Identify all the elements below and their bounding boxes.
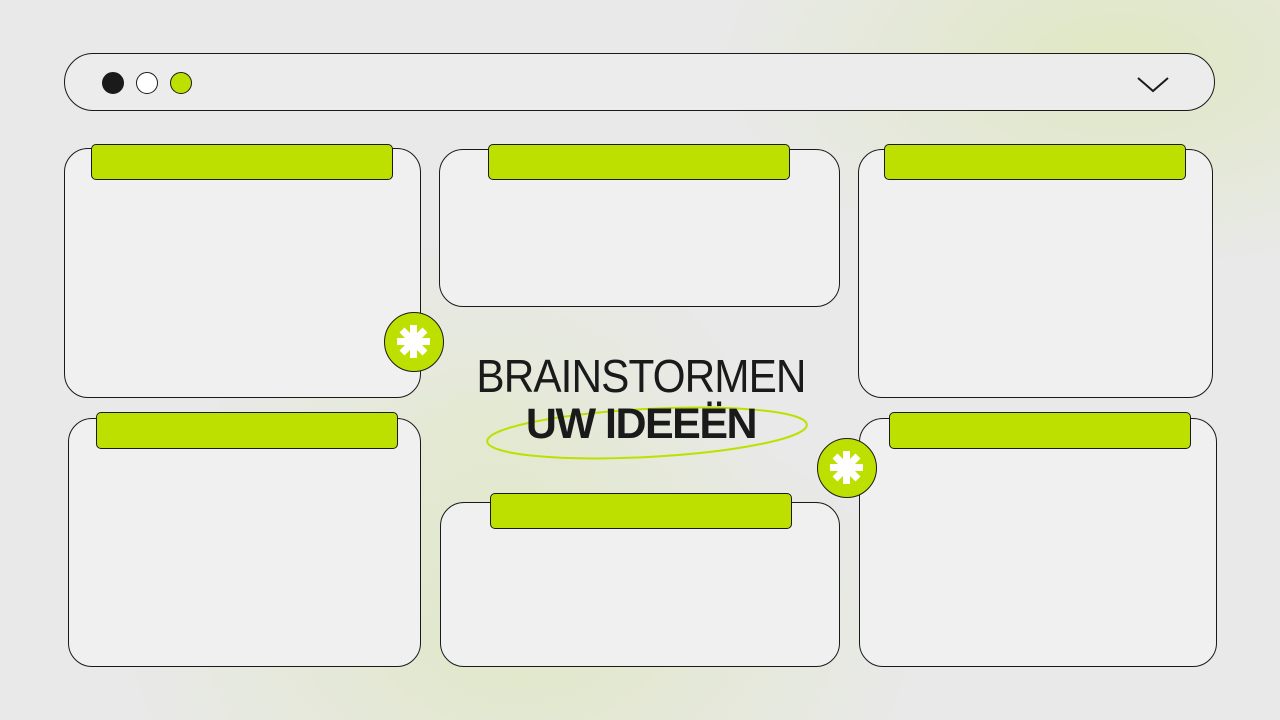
panel 1: [64, 148, 421, 398]
top browser bar: [64, 53, 1215, 111]
title: UW IDEEËN: [526, 400, 756, 448]
panel 6 tab: [889, 412, 1191, 449]
panel 4: [68, 418, 421, 667]
panel 4 tab: [96, 412, 398, 449]
icon: asterisk 1: [384, 312, 444, 372]
panel 6: [859, 418, 1217, 667]
panel 5 tab: [490, 493, 792, 529]
panel 2 tab: [488, 144, 790, 180]
window dots: [102, 72, 192, 94]
panel 2: [439, 149, 840, 307]
icon: chevron: [1137, 77, 1169, 92]
panel 3: [858, 149, 1213, 398]
icon: asterisk 2: [817, 438, 877, 498]
panel 1 tab: [91, 144, 393, 180]
panel 3 tab: [884, 144, 1186, 180]
title: [476, 350, 806, 448]
title ellipse: [486, 406, 808, 460]
title: BRAINSTORMEN: [476, 350, 806, 402]
panel 5: [440, 502, 840, 667]
